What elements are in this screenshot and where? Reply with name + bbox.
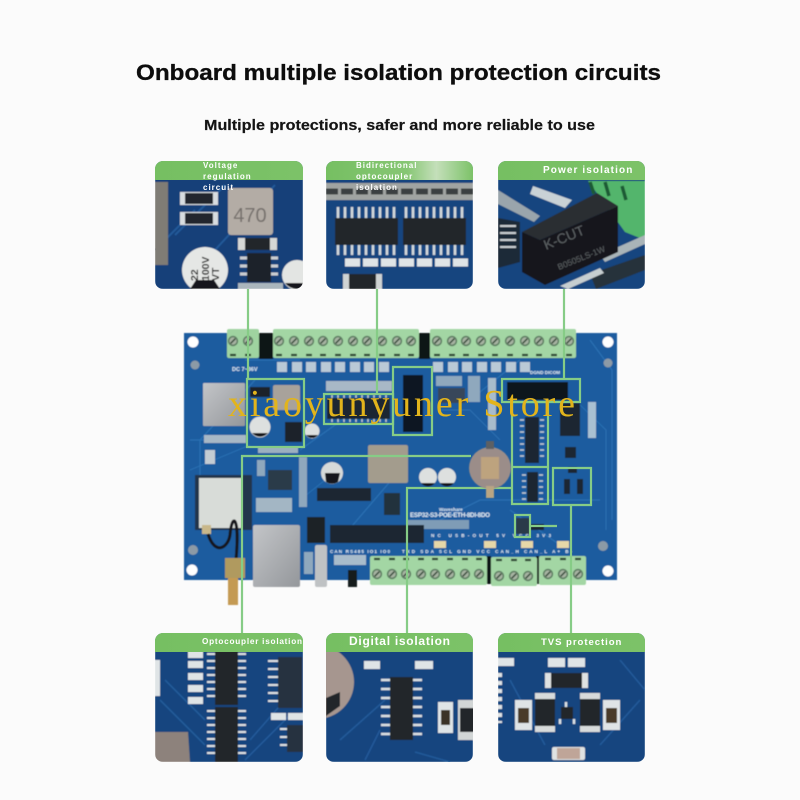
main controller IC xyxy=(268,470,292,490)
power inductor xyxy=(368,445,408,483)
digital isolator chip xyxy=(390,677,413,740)
antenna connector and cable xyxy=(208,521,245,605)
label: Voltage xyxy=(203,161,238,170)
header band xyxy=(326,161,473,180)
second capacitor xyxy=(281,259,303,289)
header band xyxy=(326,633,473,652)
label: Bidirectional xyxy=(356,161,417,170)
lower resistors xyxy=(345,258,470,266)
label: Optocoupler isolation xyxy=(202,637,302,646)
resistors xyxy=(364,661,478,740)
centre transistor xyxy=(560,702,574,724)
label: Power isolation xyxy=(543,165,633,176)
capacitor 22 100V VT: VT xyxy=(210,267,222,281)
isolator chips xyxy=(215,648,303,762)
silkscreen labels: NC USB-OUT 5V VCC 3V3 xyxy=(431,533,551,538)
line: TVS protection callout xyxy=(553,468,591,633)
line: digital isolation callout xyxy=(407,488,512,633)
K-CUT module xyxy=(522,193,618,285)
regulator components xyxy=(250,385,302,442)
resistor rows xyxy=(498,190,540,222)
ethernet jack xyxy=(253,525,300,587)
silkscreen labels xyxy=(232,367,572,554)
label: regulation xyxy=(203,172,252,181)
inductor 470 xyxy=(228,188,273,235)
pin legs on chips xyxy=(332,395,544,499)
line: optocoupler isolation callout xyxy=(242,456,471,633)
line: power isolation callout xyxy=(502,289,580,402)
label xyxy=(356,162,416,190)
resistors xyxy=(155,651,303,720)
jumpers xyxy=(434,541,569,548)
small capacitors xyxy=(304,424,456,486)
box: optocoupler isolation region xyxy=(512,402,548,504)
green terminals xyxy=(588,181,645,240)
header band xyxy=(155,633,303,652)
chip pins xyxy=(381,680,422,734)
silkscreen labels: ESP32-S3-POE-ETH-8DI-8DO xyxy=(410,512,490,519)
watermark: xiaoyunyuner Store xyxy=(228,383,575,425)
line: voltage regulation callout xyxy=(247,289,304,447)
capacitor 22 100V VT: 22 xyxy=(189,269,201,281)
chip pins xyxy=(207,654,287,753)
label xyxy=(203,162,250,190)
coin cell edge xyxy=(326,652,355,719)
SMD diodes xyxy=(180,192,218,225)
silkscreen labels: CAN RS485 IO1 IO0 xyxy=(330,549,390,554)
small chips xyxy=(238,238,278,282)
coin cell holder xyxy=(469,441,511,498)
bottom terminal blocks xyxy=(370,556,586,586)
ESP32 module xyxy=(195,475,252,534)
label: Digital isolation xyxy=(349,634,450,648)
circuit board xyxy=(184,329,617,605)
box: centre optocoupler region xyxy=(393,367,432,435)
resistor row xyxy=(326,183,473,200)
header band xyxy=(498,633,645,652)
TVS diodes sides xyxy=(535,693,600,732)
lower detail xyxy=(590,255,645,289)
silkscreen labels: Waveshare xyxy=(439,507,463,512)
silkscreen labels: TXD SDA SCL GND VCC CAN_H CAN_L A+ B- xyxy=(402,549,572,554)
dark connector at left xyxy=(498,218,520,268)
large capacitor xyxy=(321,462,343,484)
label: optocoupler xyxy=(356,172,413,181)
mounting holes xyxy=(186,336,614,576)
side resistors xyxy=(515,700,620,730)
optocoupler chips xyxy=(335,218,466,245)
diode xyxy=(343,274,382,289)
SD card slot xyxy=(203,383,245,426)
label: circuit xyxy=(203,183,234,192)
top terminal blocks xyxy=(227,329,576,358)
surface mount chips xyxy=(317,375,583,534)
bottom pads xyxy=(238,283,283,289)
panel: voltage regulation circuit xyxy=(155,161,312,293)
silkscreen labels: DC 7~36V xyxy=(232,367,258,373)
panel: bidirectional optocoupler isolation xyxy=(326,161,473,289)
diode and crystal xyxy=(307,517,357,587)
label: isolation xyxy=(356,183,398,192)
panel: power isolation xyxy=(498,161,645,289)
status LEDs and resistors xyxy=(204,362,596,574)
inductor 470: 470 xyxy=(233,205,267,227)
top resistors xyxy=(498,658,585,667)
green highlight callout lines and boxes xyxy=(242,289,591,633)
header band xyxy=(498,161,645,180)
left pads xyxy=(498,673,502,723)
box: small protection region xyxy=(515,515,557,537)
chip pins xyxy=(338,207,462,255)
K-CUT module: B0505LS-1W xyxy=(556,244,607,272)
line: bidirectional optocoupler callout xyxy=(324,289,393,424)
panel: TVS protection xyxy=(498,633,645,762)
gold connector xyxy=(155,732,190,762)
capacitor 22 100V VT xyxy=(182,247,228,293)
TVS diode top xyxy=(545,673,588,688)
capacitor 22 100V VT: 100V xyxy=(200,256,212,281)
silkscreen labels: DGND DICOM xyxy=(530,370,560,375)
subtitle: Multiple protections, safer and more reliable to use xyxy=(204,118,595,134)
panel: optocoupler isolation xyxy=(155,633,303,762)
panel: digital isolation xyxy=(326,633,473,762)
pin header xyxy=(330,525,424,543)
header band xyxy=(155,161,303,180)
bottom capacitor xyxy=(552,747,585,760)
K-CUT module: K-CUT xyxy=(541,222,587,253)
connector strip xyxy=(155,182,168,265)
label: TVS protection xyxy=(541,637,622,648)
black sockets between connectors xyxy=(259,333,539,584)
title: Onboard multiple isolation protection circuits xyxy=(136,60,661,85)
